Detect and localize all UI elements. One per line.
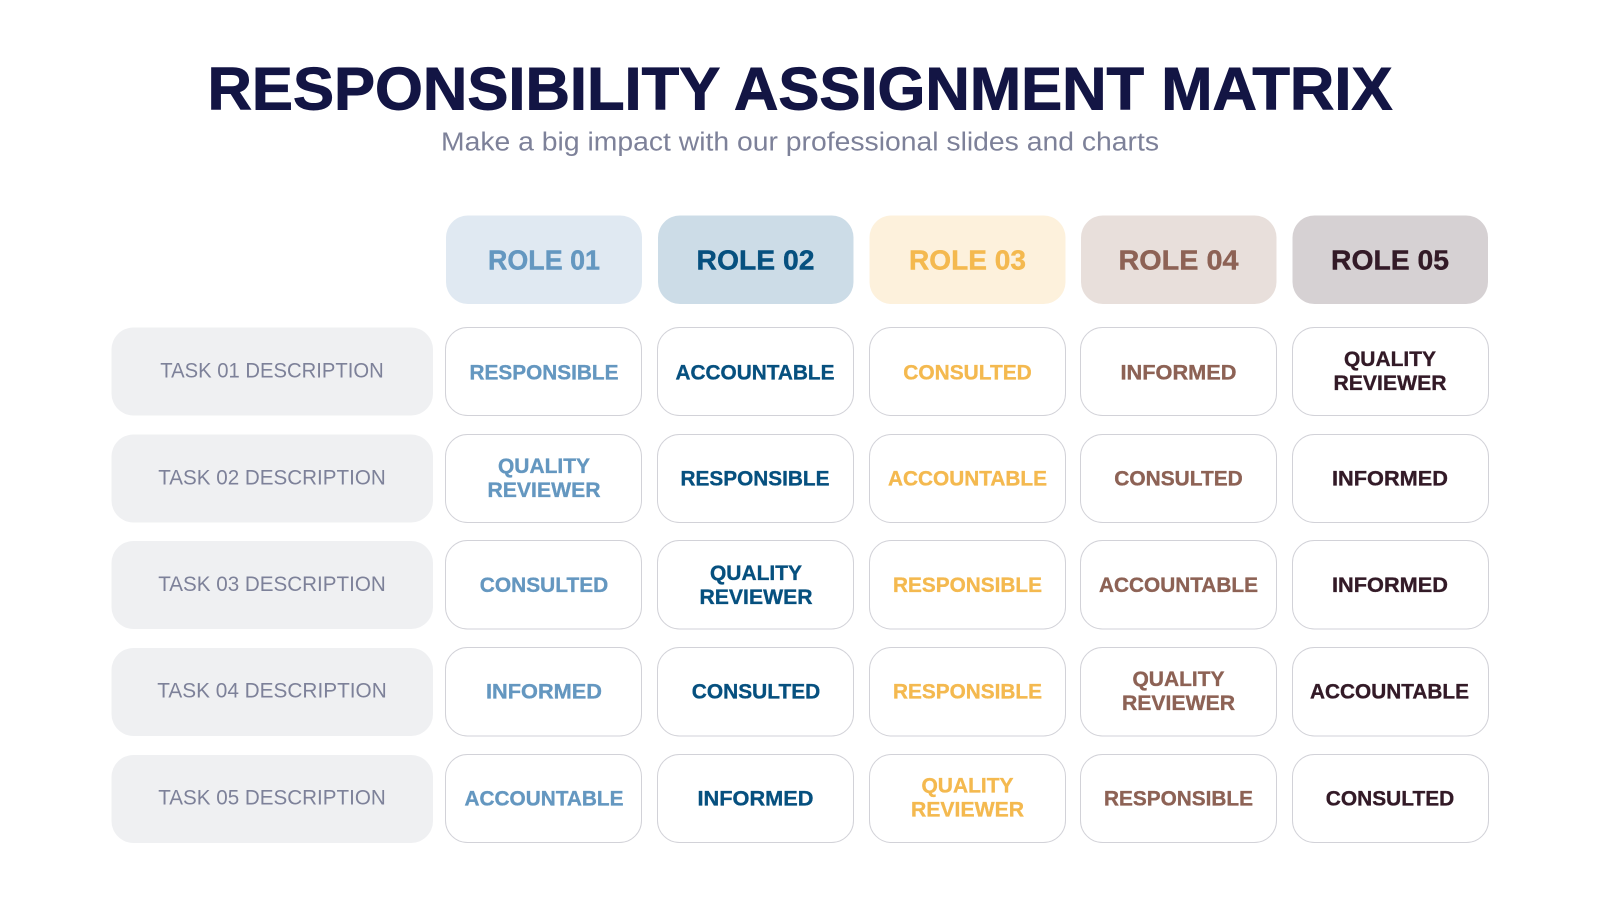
- row 4 role 2: consulted: [658, 648, 854, 736]
- header: role 04: ROLE 04: [1118, 244, 1239, 276]
- row 1 role 4: informed: [1080, 328, 1276, 416]
- row 5: task label: TASK 05 DESCRIPTION: [158, 786, 386, 810]
- row 5 role 2: informed: INFORMED: [698, 788, 814, 810]
- row 4 role 4: quality reviewer: [1080, 648, 1276, 736]
- row 4 role 2: consulted: CONSULTED: [692, 680, 820, 704]
- row 2 role 1: quality reviewer: [446, 434, 642, 522]
- row 4 role 5: accountable: [1292, 648, 1488, 736]
- row 3 role 4: accountable: [1080, 540, 1276, 629]
- row 3 role 3: responsible: RESPONSIBLE: [893, 574, 1042, 597]
- row 5 role 4: responsible: [1080, 754, 1276, 842]
- row 1 role 5: quality reviewer: REVIEWER: [1334, 372, 1446, 395]
- row 5 role 1: accountable: [446, 754, 642, 842]
- row 1: task label: TASK 01 DESCRIPTION: [160, 360, 384, 382]
- header: role 01: ROLE 01: [488, 244, 600, 276]
- row 2 role 5: informed: [1292, 434, 1488, 522]
- row 4 role 3: responsible: RESPONSIBLE: [893, 680, 1042, 704]
- row 1 role 5: quality reviewer: [1292, 328, 1488, 416]
- header: role 03: ROLE 03: [909, 244, 1026, 276]
- row 3 role 1: consulted: CONSULTED: [480, 574, 608, 597]
- row 3 role 2: quality reviewer: [658, 540, 854, 629]
- row 4 role 1: informed: [446, 648, 642, 736]
- row 3 role 2: quality reviewer: REVIEWER: [700, 586, 812, 609]
- row 3 role 3: responsible: [870, 540, 1066, 629]
- row 5 role 5: consulted: [1292, 754, 1488, 842]
- row 2 role 2: responsible: [658, 434, 854, 522]
- row 1 role 4: informed: INFORMED: [1120, 362, 1236, 384]
- row 3 role 5: informed: [1292, 540, 1488, 629]
- row 1 role 2: accountable: [658, 328, 854, 416]
- row 4 role 3: responsible: [870, 648, 1066, 736]
- row 5 role 1: accountable: ACCOUNTABLE: [464, 788, 624, 810]
- header: role 05: [1292, 216, 1488, 304]
- row 1 role 1: responsible: RESPONSIBLE: [470, 362, 618, 384]
- row 4 role 1: informed: INFORMED: [486, 680, 602, 704]
- row 1 role 5: quality reviewer: QUALITY: [1344, 348, 1436, 371]
- row 4 role 4: quality reviewer: REVIEWER: [1122, 692, 1235, 715]
- row 3 role 1: consulted: [446, 540, 642, 629]
- row 1: task label: [112, 328, 433, 416]
- row 4 role 4: quality reviewer: QUALITY: [1132, 668, 1224, 691]
- header: role 02: [658, 216, 854, 304]
- row 2 role 1: quality reviewer: REVIEWER: [488, 479, 600, 502]
- row 2 role 1: quality reviewer: QUALITY: [498, 455, 590, 478]
- row 3: task label: TASK 03 DESCRIPTION: [158, 573, 386, 596]
- row 2: task label: [112, 434, 433, 522]
- header: role 01: [446, 216, 642, 304]
- row 2 role 4: consulted: [1080, 434, 1276, 522]
- row 2 role 3: accountable: ACCOUNTABLE: [888, 468, 1047, 490]
- row 1 role 3: consulted: CONSULTED: [903, 362, 1032, 384]
- row 5 role 3: quality reviewer: QUALITY: [922, 774, 1014, 798]
- row 5 role 4: responsible: RESPONSIBLE: [1104, 788, 1253, 810]
- row 1 role 1: responsible: [446, 328, 642, 416]
- row 3: task label: [112, 541, 433, 629]
- row 5 role 3: quality reviewer: [870, 754, 1066, 842]
- header: role 02: ROLE 02: [696, 244, 814, 276]
- row 4 role 5: accountable: ACCOUNTABLE: [1310, 680, 1469, 704]
- row 4: task label: [112, 648, 433, 736]
- row 1 role 3: consulted: [870, 328, 1066, 416]
- row 2 role 5: informed: INFORMED: [1332, 468, 1448, 490]
- header: role 03: [870, 216, 1066, 304]
- header: role 05: ROLE 05: [1331, 244, 1449, 276]
- row 4: task label: TASK 04 DESCRIPTION: [157, 680, 387, 702]
- row 2 role 2: responsible: RESPONSIBLE: [680, 468, 830, 490]
- row 3 role 4: accountable: ACCOUNTABLE: [1099, 574, 1258, 597]
- row 5 role 3: quality reviewer: REVIEWER: [911, 798, 1024, 822]
- row 2 role 3: accountable: [870, 434, 1066, 522]
- title: RESPONSIBILITY ASSIGNMENT MATRIX: [208, 56, 1392, 122]
- row 1 role 2: accountable: ACCOUNTABLE: [676, 362, 834, 384]
- header: role 04: [1081, 216, 1276, 304]
- row 5 role 2: informed: [658, 754, 854, 842]
- row 5 role 5: consulted: CONSULTED: [1326, 788, 1454, 810]
- row 5: task label: [112, 755, 433, 843]
- row 3 role 2: quality reviewer: QUALITY: [710, 562, 802, 585]
- row 2 role 4: consulted: CONSULTED: [1114, 468, 1243, 490]
- subtitle: Make a big impact with our professional slides and charts: [441, 128, 1159, 156]
- row 3 role 5: informed: INFORMED: [1332, 574, 1448, 597]
- row 2: task label: TASK 02 DESCRIPTION: [158, 466, 386, 490]
